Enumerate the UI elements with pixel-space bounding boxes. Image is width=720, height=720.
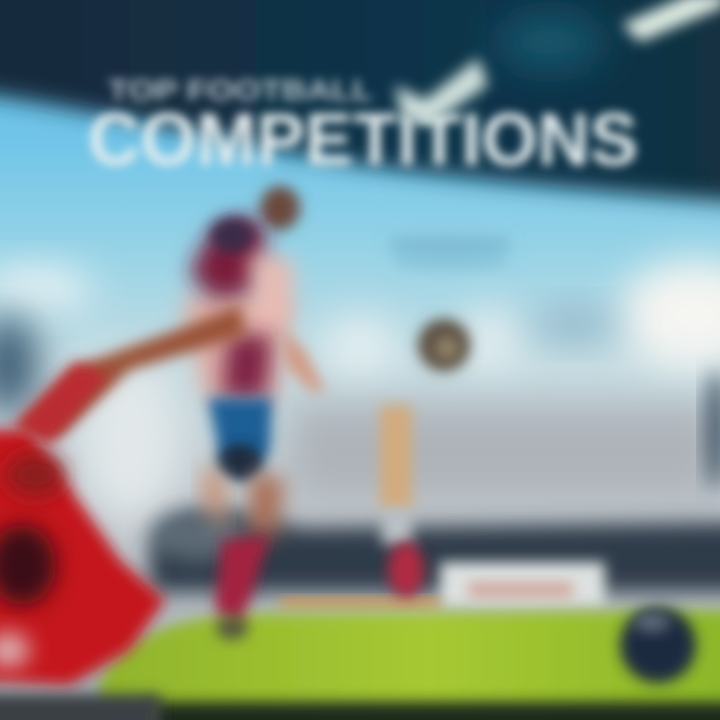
- faint mid-sky caption: [390, 238, 510, 266]
- stadium stands: [150, 509, 720, 608]
- logo swoosh above title: [395, 58, 488, 125]
- clouds: [0, 234, 720, 520]
- stadium roof: [0, 0, 720, 205]
- jumping player: [15, 186, 325, 640]
- goal post / distant player: [380, 405, 424, 598]
- pitch: [0, 610, 720, 720]
- title text: TOP FOOTBALL: [108, 75, 373, 107]
- football in the air: [418, 319, 470, 371]
- football on the ground: [620, 607, 696, 683]
- foreground player in red: [0, 362, 165, 685]
- title text: COMPETITIONS: [88, 98, 638, 181]
